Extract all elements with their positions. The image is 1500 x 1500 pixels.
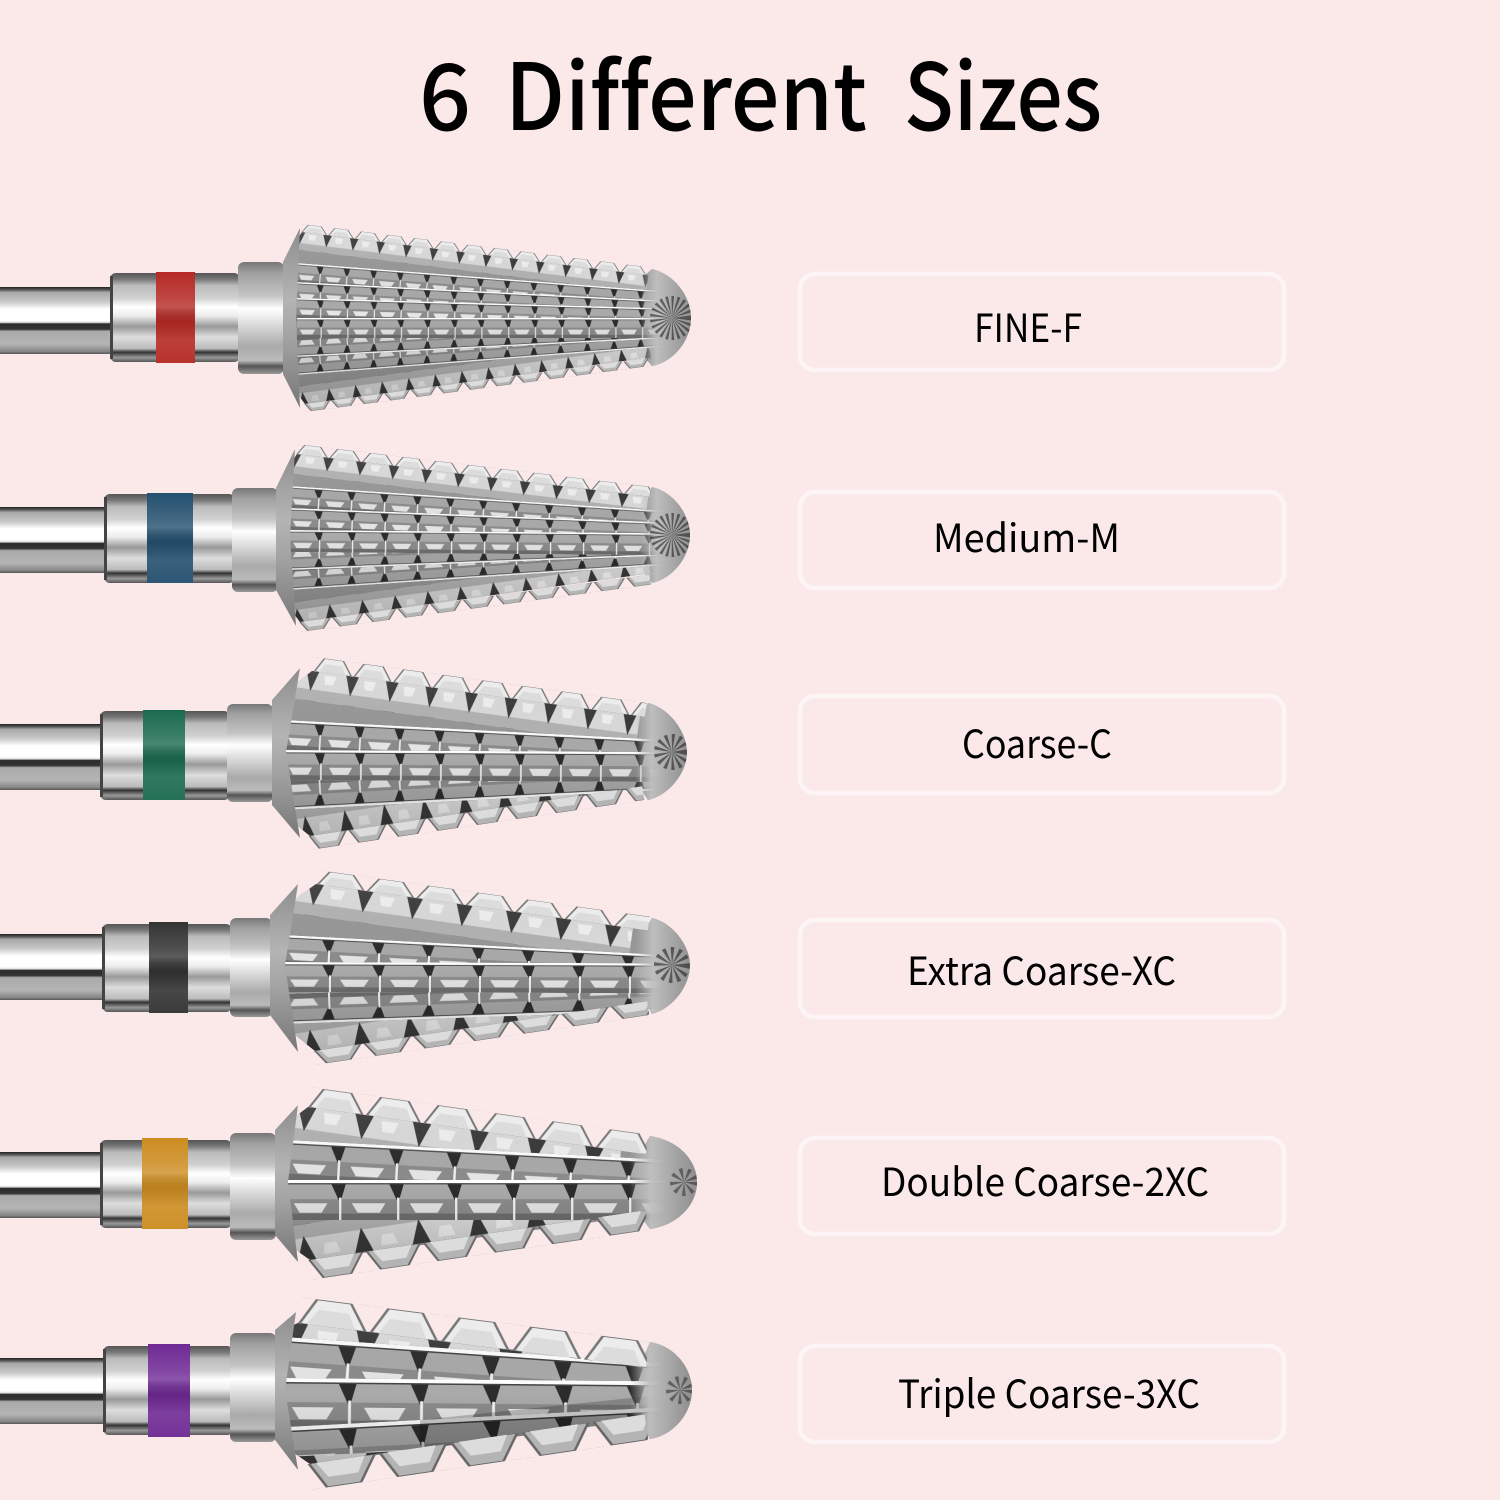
drill bit: double coarse, orange band [0, 1080, 705, 1290]
label: Coarse-C: Coarse-C [962, 714, 1112, 770]
label: Triple Coarse-3XC [800, 1346, 1284, 1442]
drill bit: triple coarse, purple band [0, 1290, 705, 1495]
label: Double Coarse-2XC [800, 1138, 1284, 1234]
drill bit: fine, red band [0, 224, 691, 412]
label: Medium-M: Medium-M [933, 508, 1120, 564]
label: Extra Coarse-XC: Extra Coarse-XC [907, 941, 1176, 997]
title [419, 24, 1102, 157]
label: Coarse-C [800, 696, 1284, 793]
label: Double Coarse-2XC: Double Coarse-2XC [881, 1152, 1209, 1208]
drill bit: medium, blue band [0, 444, 690, 632]
title: 6 [419, 24, 471, 157]
title: Different [505, 24, 867, 157]
label: Extra Coarse-XC [800, 920, 1284, 1017]
label: Medium-M [800, 492, 1284, 588]
label: Triple Coarse-3XC: Triple Coarse-3XC [898, 1364, 1200, 1420]
label: FINE-F: FINE-F [974, 298, 1082, 354]
title: Sizes [904, 24, 1102, 157]
label: FINE-F [800, 274, 1284, 370]
drill bit: extra coarse, black band [0, 860, 695, 1075]
drill bit: coarse, green band [0, 650, 695, 860]
